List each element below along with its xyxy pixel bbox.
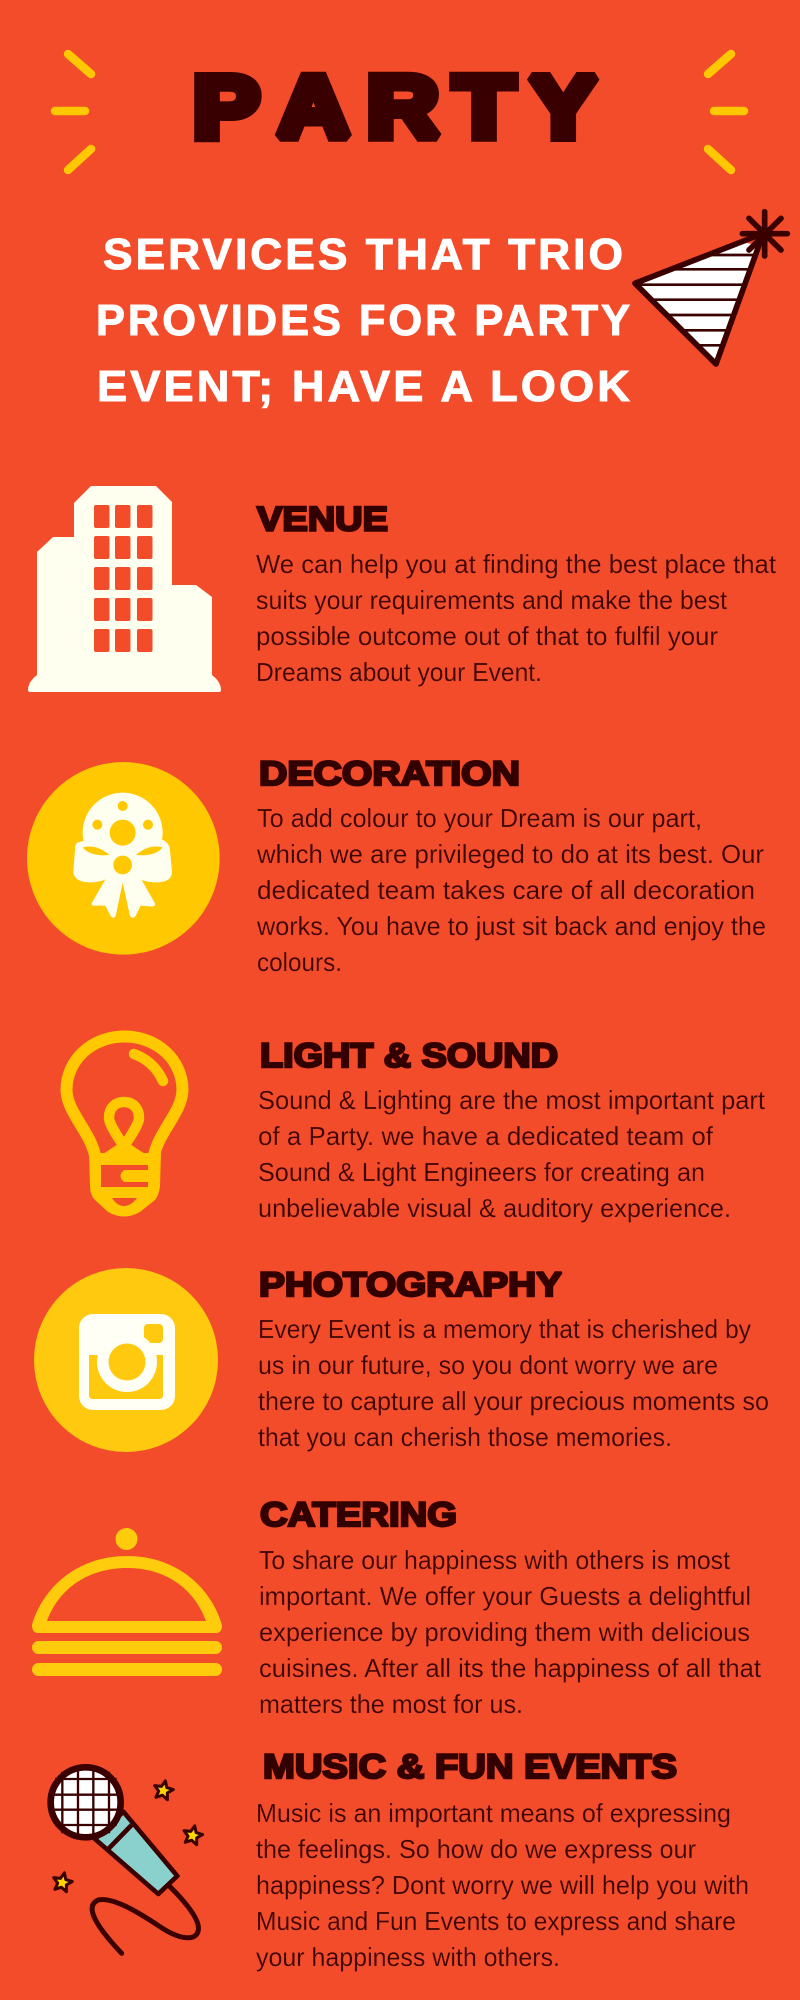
- text: decoration description: colours.: [257, 947, 342, 977]
- text: catering description: important. We offer your Guests a delightful: [259, 1581, 751, 1611]
- subtitle: PROVIDES FOR PARTY: [96, 296, 633, 345]
- subtitle: EVENT; HAVE A LOOK: [97, 362, 633, 411]
- icon: microphone with stars: [51, 1767, 204, 1953]
- panel: music and fun events: [51, 1748, 749, 1972]
- text: photography description: there to capture all your precious moments so: [258, 1386, 769, 1416]
- text: catering description: To share our happiness with others is most: [259, 1545, 731, 1575]
- subtitle: [96, 230, 633, 411]
- icon: building: [28, 486, 221, 692]
- text: decoration description: [256, 803, 766, 977]
- text: decoration description: dedicated team takes care of all decoration: [257, 875, 755, 905]
- text: catering description: matters the most for us.: [259, 1689, 523, 1719]
- text: catering description: cuisines. After all its the happiness of all that: [259, 1653, 762, 1683]
- text: venue description: possible outcome out of that to fulfil your: [256, 621, 718, 651]
- text: venue description: Dreams about your Event.: [256, 657, 542, 687]
- icon: right sunburst dashes: [708, 54, 744, 170]
- icon: party hat: [633, 212, 787, 364]
- text: catering description: experience by providing them with delicious: [259, 1617, 750, 1647]
- title: PARTY: [193, 59, 596, 156]
- text: decoration description: which we are privileged to do at its best. Our: [256, 839, 764, 869]
- heading: light and sound: LIGHT & SOUND: [260, 1037, 558, 1075]
- panel: decoration: [27, 755, 766, 977]
- text: music and fun events description: [256, 1798, 749, 1972]
- icon: serving cloche: [32, 1528, 222, 1676]
- text: photography description: that you can cherish those memories.: [258, 1422, 672, 1452]
- text: music and fun events description: the feelings. So how do we express our: [256, 1834, 696, 1864]
- text: decoration description: works. You have to just sit back and enjoy the: [256, 911, 766, 941]
- icon: camera in circle: [34, 1268, 218, 1452]
- panel: venue: [28, 486, 777, 692]
- panel: photography: [34, 1266, 769, 1452]
- heading: catering: CATERING: [260, 1496, 457, 1534]
- panel: light and sound: [66, 1036, 766, 1223]
- heading: venue: VENUE: [257, 500, 388, 538]
- subtitle: SERVICES THAT TRIO: [103, 230, 626, 279]
- text: music and fun events description: your happiness with others.: [256, 1942, 560, 1972]
- text: photography description: [258, 1314, 769, 1452]
- heading: photography: PHOTOGRAPHY: [259, 1266, 562, 1304]
- text: catering description: [259, 1545, 762, 1719]
- heading: decoration: DECORATION: [259, 755, 520, 793]
- text: music and fun events description: Music and Fun Events to express and share: [256, 1906, 736, 1936]
- text: photography description: us in our future, so you dont worry we are: [258, 1350, 718, 1380]
- heading: music and fun events: MUSIC & FUN EVENTS: [263, 1748, 677, 1786]
- text: light and sound description: Sound & Light Engineers for creating an: [258, 1157, 705, 1187]
- text: light and sound description: Sound & Lighting are the most important part: [258, 1085, 766, 1115]
- text: venue description: We can help you at finding the best place that: [256, 549, 777, 579]
- icon: left sunburst dashes: [55, 54, 91, 170]
- text: decoration description: To add colour to your Dream is our part,: [257, 803, 702, 833]
- panel: catering: [32, 1496, 762, 1719]
- text: light and sound description: of a Party. we have a dedicated team of: [258, 1121, 714, 1151]
- text: music and fun events description: Music is an important means of expressing: [256, 1798, 731, 1828]
- icon: ribbon wreath in circle: [27, 762, 220, 955]
- text: light and sound description: unbelievable visual & auditory experience.: [258, 1193, 731, 1223]
- text: venue description: [256, 549, 777, 687]
- text: photography description: Every Event is a memory that is cherished by: [258, 1314, 751, 1344]
- text: music and fun events description: happiness? Dont worry we will help you with: [256, 1870, 749, 1900]
- text: light and sound description: [258, 1085, 766, 1223]
- icon: light bulb: [66, 1036, 182, 1216]
- text: venue description: suits your requirements and make the best: [256, 585, 728, 615]
